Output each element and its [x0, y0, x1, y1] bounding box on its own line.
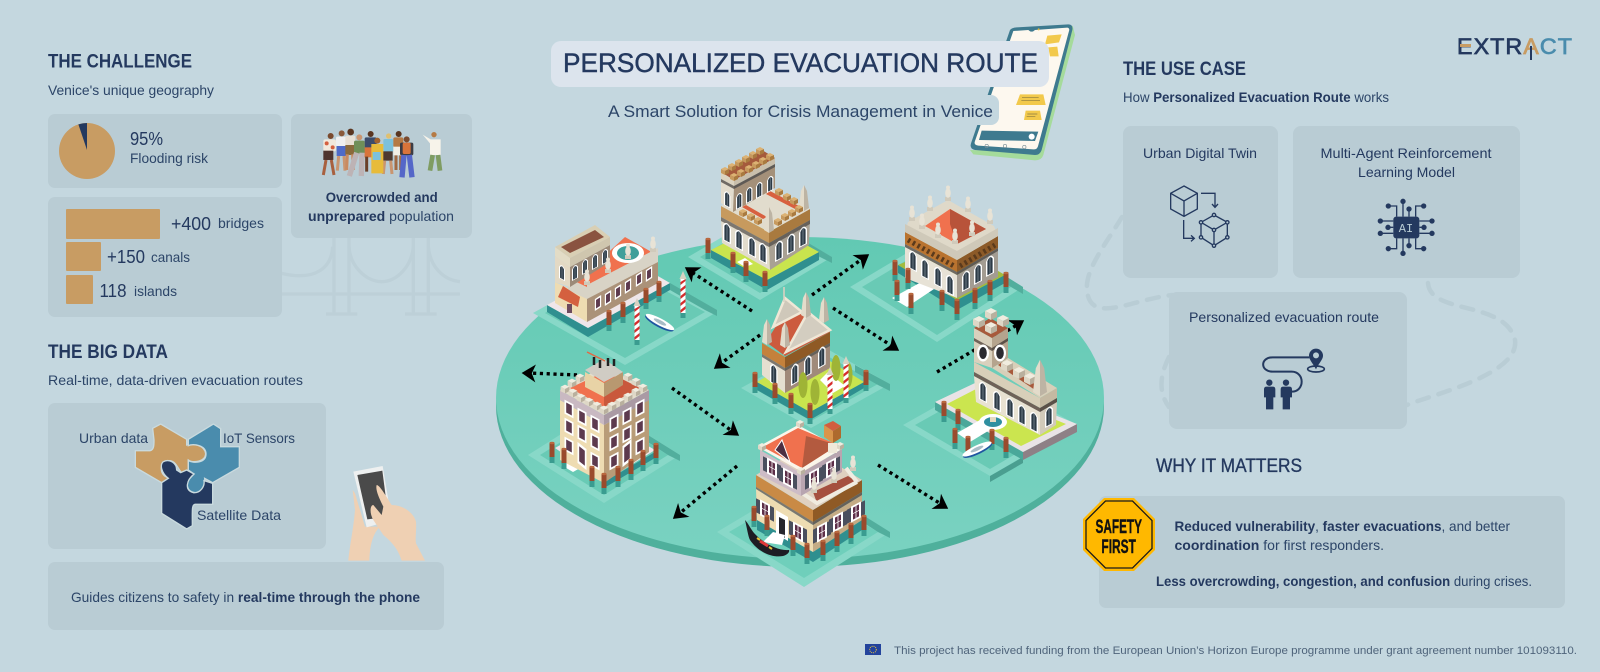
subtitle: [600, 95, 999, 125]
illustration: hand holding phone: [348, 466, 425, 561]
value: 118: 118: [100, 281, 126, 301]
label: learning model line: Learning Model: [1358, 164, 1455, 180]
building: upper left palace: [533, 225, 717, 365]
title: PERSONALIZED EVACUATION ROUTE: [563, 48, 1038, 78]
footer: funding statement: This project has received funding from the European Union’s Horizon Europe programme under grant agreement number 101093110.: [894, 645, 1577, 657]
building: top right palace: [850, 186, 1023, 342]
building: clock tower: [903, 308, 1077, 482]
icon: people and route: [1263, 349, 1324, 409]
label: multi-agent line: Multi-Agent Reinforcement: [1320, 145, 1492, 161]
icon: eu flag: [865, 644, 881, 655]
text: reduced vulnerability: Reduced vulnerability, faster evacuations, and better: [1174, 518, 1510, 534]
decorative dashed route: [1087, 217, 1515, 407]
panel: data sources: [48, 403, 326, 549]
arrow: behind clock tower: [937, 315, 1027, 372]
label: canals: canals: [151, 249, 190, 265]
panel: flooding risk: [48, 114, 282, 188]
panel: marl model: [1293, 126, 1520, 278]
bar: bridges: [66, 209, 160, 239]
arrow: to east: [833, 308, 902, 356]
bar: canals: [66, 242, 101, 271]
subheading: geography: Venice's unique geography: [48, 82, 214, 98]
heading: the challenge: THE CHALLENGE: [48, 52, 192, 72]
value: +400: +400: [171, 214, 211, 234]
subtitle: A Smart Solution for Crisis Management in Venice: [608, 103, 993, 121]
building: bottom house with gondola: [717, 420, 890, 587]
arrow: to far south-east: [878, 465, 951, 514]
title pill: [551, 41, 1049, 87]
decorative bridge silhouette: [282, 237, 460, 315]
heading: the use case: THE USE CASE: [1123, 59, 1246, 80]
map: venice disc: [496, 237, 1104, 567]
text: overcrowded and: Overcrowded and: [326, 189, 438, 205]
icon: ai chip: [1378, 199, 1435, 256]
logo: extract: EXTRACT: [1457, 34, 1573, 59]
label: urban data: Urban data: [79, 430, 148, 446]
subheading: how it works: How Personalized Evacuation Route works: [1123, 89, 1389, 105]
illustration: crowd of tourists: [323, 129, 441, 177]
label: bridges: bridges: [218, 215, 264, 231]
panel: geography bars: [48, 197, 282, 317]
text: unprepared population: unprepared population: [308, 208, 454, 224]
panel: guides citizens: [48, 562, 444, 630]
value: +150: +150: [107, 247, 145, 267]
value: 95%: 95%: [130, 129, 163, 149]
text: coordination: coordination for first responders.: [1174, 537, 1384, 553]
label: personalized evacuation route: Personalized evacuation route: [1189, 309, 1379, 325]
icon: safety first sign: SAFETY: [1096, 516, 1142, 538]
arrow: to west: [523, 366, 577, 380]
puzzle: three data sources: [135, 424, 239, 529]
panel: personalized route: [1169, 292, 1407, 429]
arrow: to north-east: [812, 249, 872, 295]
panel: why it matters: [1099, 496, 1565, 608]
icon: safety first sign: FIRST: [1101, 536, 1136, 558]
heading: the big data: THE BIG DATA: [48, 342, 168, 363]
label: iot sensors: IoT Sensors: [223, 430, 295, 446]
illustration: smartphone behind title: [970, 24, 1075, 160]
label: islands: islands: [134, 283, 177, 299]
building: top centre tower: [688, 147, 832, 300]
label: satellite data: Satellite Data: [197, 507, 281, 523]
icon: digital twin cubes: [1171, 186, 1229, 247]
arrow: to south-east: [672, 388, 742, 441]
label: urban digital twin: Urban Digital Twin: [1143, 145, 1257, 161]
text: less overcrowding: Less overcrowding, congestion, and confusion during crises.: [1156, 573, 1532, 589]
arrow: to south-west centre: [711, 335, 760, 374]
text: guides citizens: Guides citizens to safety in real-time through the phone: [71, 589, 420, 605]
bar: islands: [66, 275, 93, 304]
building: lower left block: [528, 352, 680, 503]
pie chart: 95 percent: [59, 123, 115, 179]
panel: overcrowded population: [291, 114, 472, 238]
heading: why it matters: WHY IT MATTERS: [1156, 456, 1302, 477]
label: flooding risk: Flooding risk: [130, 150, 209, 166]
arrow: to south-west: [670, 466, 737, 523]
icon: ai chip: AI: [1399, 222, 1413, 236]
icon: safety first sign: [1083, 498, 1155, 571]
subheading: real-time routes: Real-time, data-driven evacuation routes: [48, 372, 303, 388]
panel: urban digital twin: [1123, 126, 1278, 278]
building: centre gabled house: [741, 287, 890, 428]
arrow: to north-west: [682, 262, 752, 311]
